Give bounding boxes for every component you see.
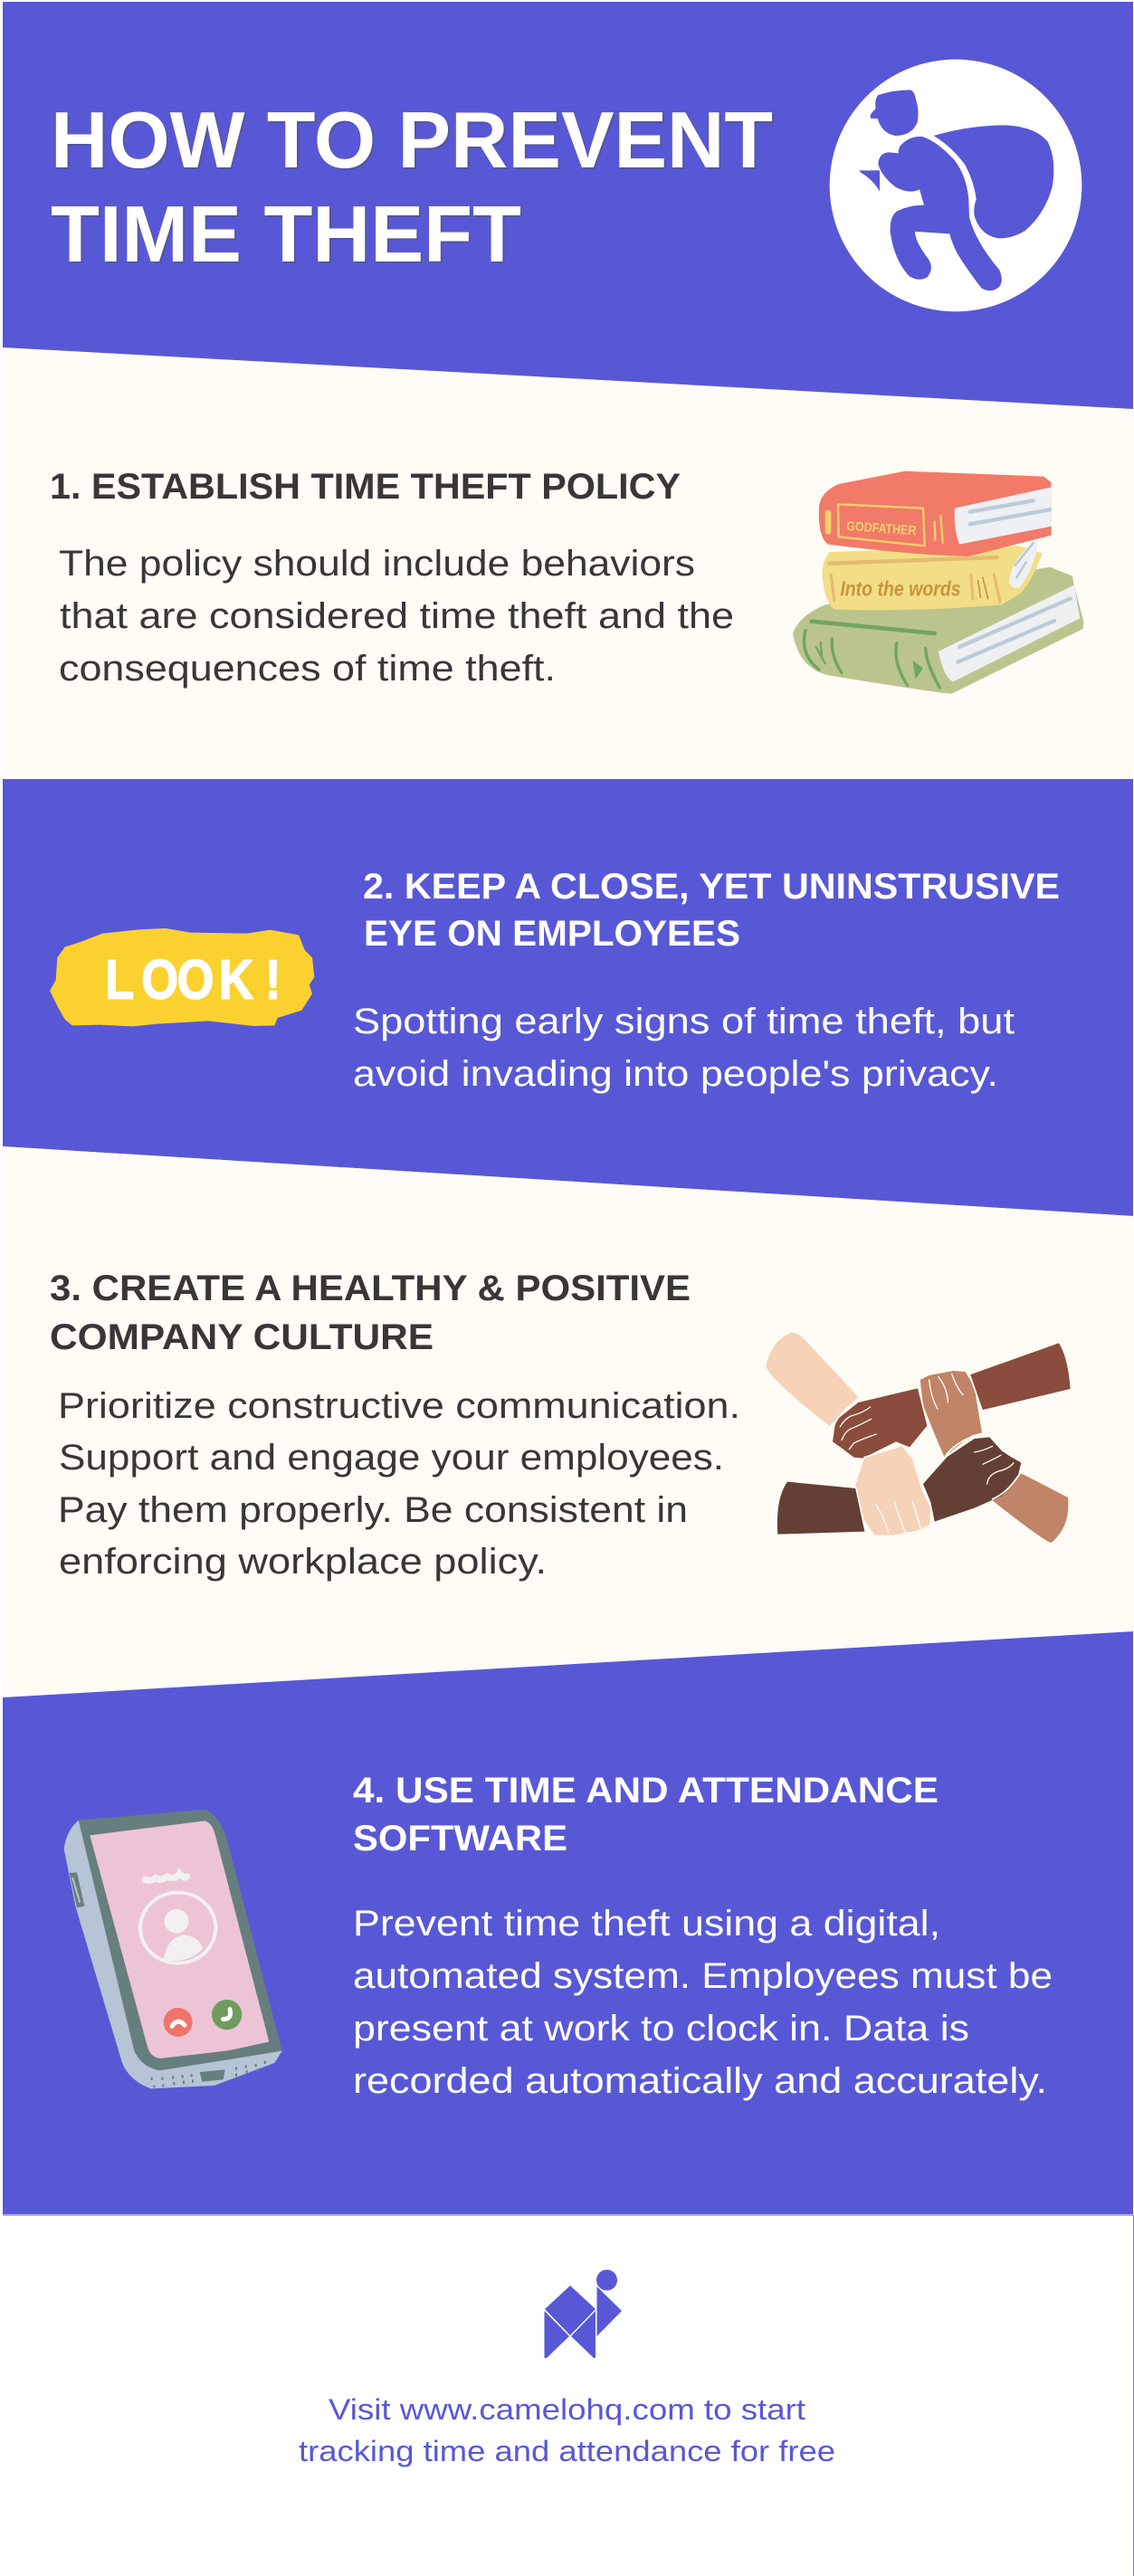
icon: LOOK sign — [50, 928, 314, 1026]
icon: stack of books — [793, 471, 1083, 694]
text block: footer call to action — [299, 2393, 835, 2467]
heading: section 3: COMPANY CULTURE — [50, 1317, 434, 1357]
text block: section 4 body — [353, 1904, 1053, 2101]
heading: section 2: 2. KEEP A CLOSE, YET UNINSTRUSIVE — [363, 867, 1060, 907]
text block: section 1 body — [59, 544, 734, 689]
heading: section 2: EYE ON EMPLOYEES — [364, 914, 740, 954]
text block: footer call to action: tracking time and attendance for free — [299, 2435, 835, 2467]
title: TIME THEFT — [51, 189, 521, 279]
icon: LOOK sign: LOOK! — [105, 948, 281, 1011]
text block: section 3 body: Support and engage your employees. — [59, 1438, 724, 1478]
heading: section 1: 1. ESTABLISH TIME THEFT POLICY — [50, 467, 681, 507]
panel: footer — [299, 2269, 835, 2467]
text block: section 4 body: Prevent time theft using a digital, — [353, 1904, 940, 1944]
text block: section 1 body: consequences of time theft. — [59, 649, 556, 689]
icon: linked hands — [766, 1333, 1071, 1543]
icon: stack of books: GODFATHER — [846, 519, 917, 538]
icon: camelo logo — [545, 2269, 622, 2358]
panel: section 1 establish policy — [3, 344, 1133, 779]
icon: thief with sack — [830, 60, 1082, 311]
text block: section 3 body — [58, 1386, 740, 1582]
text block: section 3 body: Pay them properly. Be consistent in — [58, 1490, 688, 1530]
text block: section 1 body: that are considered time theft and the — [60, 596, 734, 636]
text block: section 2 body: Spotting early signs of time theft, but — [353, 1002, 1015, 1041]
heading: section 2 — [363, 867, 1060, 954]
text block: footer call to action: Visit www.camelohq.com to start — [329, 2393, 805, 2426]
title: HOW TO PREVENT — [51, 95, 773, 185]
icon: smartphone call — [64, 1810, 282, 2088]
panel: header — [3, 2, 1133, 409]
text block: section 1 body: The policy should include behaviors — [59, 544, 695, 584]
heading: section 3: 3. CREATE A HEALTHY & POSITIVE — [50, 1269, 691, 1308]
heading: section 3 — [50, 1269, 691, 1357]
heading: section 4: 4. USE TIME AND ATTENDANCE — [353, 1771, 939, 1811]
title — [51, 95, 773, 279]
text block: section 2 body: avoid invading into people's privacy. — [353, 1054, 998, 1094]
text block: section 3 body: enforcing workplace policy. — [59, 1542, 547, 1582]
icon: stack of books: Into the words — [840, 576, 961, 600]
heading: section 4: SOFTWARE — [353, 1819, 567, 1858]
heading: section 4 — [353, 1771, 939, 1858]
text block: section 4 body: automated system. Employees must be — [353, 1956, 1053, 1996]
text block: section 4 body: present at work to clock in. Data is — [353, 2009, 969, 2048]
panel: section 3 company culture — [3, 1146, 1133, 1699]
panel: section 4 software — [3, 1631, 1133, 2216]
text block: section 4 body: recorded automatically and accurately. — [353, 2061, 1047, 2101]
text block: section 3 body: Prioritize constructive communication. — [58, 1386, 740, 1426]
panel: section 2 watch employees — [3, 779, 1133, 1216]
text block: section 2 body — [353, 1002, 1015, 1094]
